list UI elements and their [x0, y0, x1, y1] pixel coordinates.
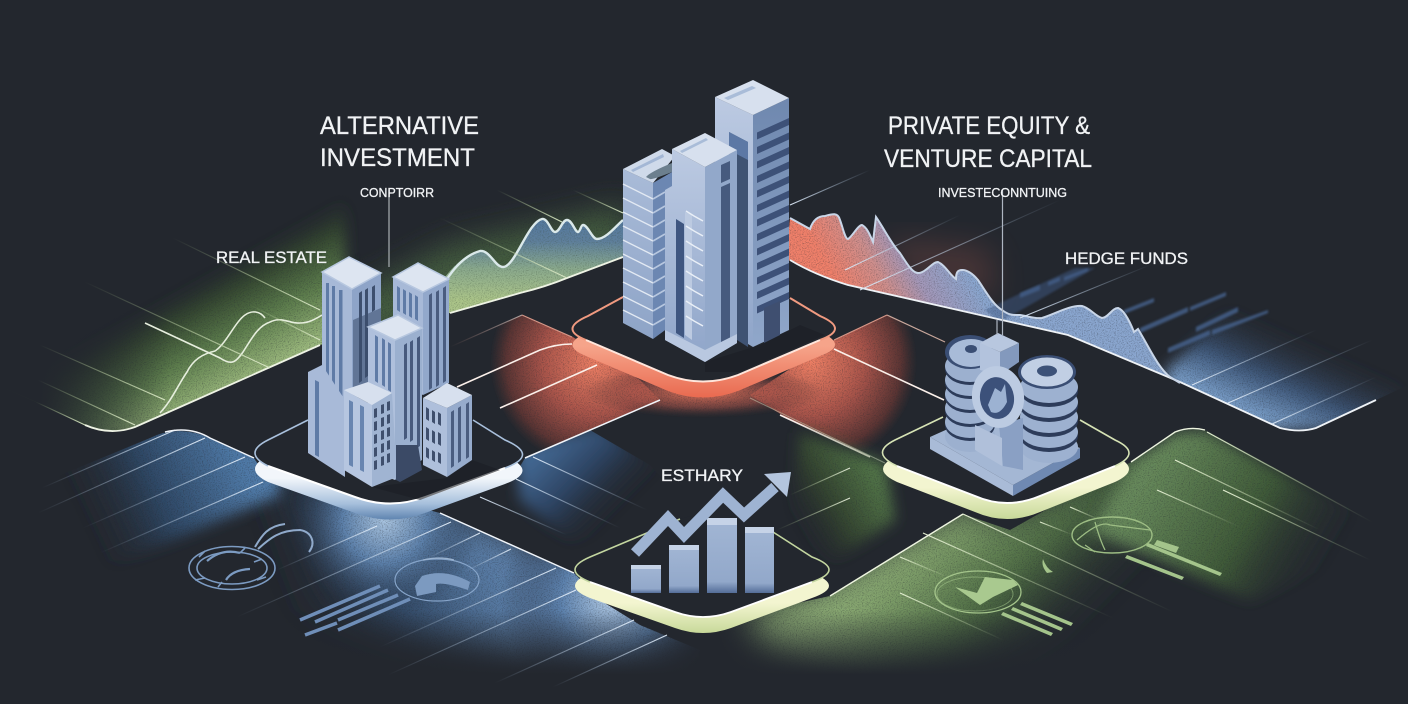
mid green wedge — [790, 432, 895, 560]
cube — [980, 333, 1019, 375]
front left block — [344, 382, 397, 487]
heading: private equity and venture capital: PRIVATE EQUITY & — [888, 112, 1090, 140]
icon: blue globe with bars — [300, 558, 479, 635]
panel: red and blue falling chart region right — [785, 170, 1400, 430]
icon: green globe two with speed bars — [1042, 517, 1222, 580]
stripe lines — [790, 170, 1376, 424]
upper right blue wedge — [510, 430, 640, 532]
right stack — [1018, 355, 1078, 463]
panel: right platform — [882, 402, 1129, 519]
bottom fade — [0, 610, 1408, 675]
panel: blue region bottom left — [88, 430, 688, 668]
icon: blue ring — [189, 524, 312, 590]
hazy band behind chart — [985, 268, 1095, 322]
leader line: left — [388, 190, 390, 267]
label: conptoirr: CONPTOIRR — [360, 185, 434, 200]
heading: alternative investment: INVESTMENT — [320, 144, 475, 172]
icon: left office building cluster — [308, 257, 500, 500]
front right block — [423, 383, 472, 477]
lower edge line — [85, 257, 623, 431]
tower: left slotted — [623, 149, 675, 339]
shadow — [705, 325, 825, 372]
bars — [631, 518, 774, 593]
panel: red glow around centre platform — [455, 314, 946, 458]
label: hedge funds: HEDGE FUNDS — [1065, 249, 1188, 268]
panel: green chart region left — [36, 191, 623, 432]
tower three — [368, 315, 422, 480]
label: investeconntuing: INVESTECONNTUING — [938, 185, 1067, 200]
chart curve — [790, 214, 1180, 383]
stripe lines: green region — [750, 398, 1372, 640]
recessed entrance — [396, 445, 422, 482]
bars behind chart — [1020, 268, 1268, 353]
panel: green region bottom right — [734, 424, 1323, 668]
leader line: right — [997, 190, 1002, 335]
heading: private equity and venture capital — [884, 112, 1092, 173]
base slab — [930, 437, 1013, 496]
panel: centre platform — [572, 275, 835, 398]
left stack — [945, 335, 995, 452]
heading: alternative investment — [320, 112, 479, 172]
tower: middle — [665, 133, 737, 362]
icon: green globe one with speed bars — [935, 571, 1073, 636]
lower edge line — [790, 260, 1376, 430]
panel: left platform — [255, 402, 522, 520]
heading: alternative investment: ALTERNATIVE — [320, 112, 479, 140]
rising arrow — [635, 472, 791, 553]
label: esthary: ESTHARY — [661, 466, 743, 485]
label: real estate: REAL ESTATE — [216, 249, 327, 267]
medallion on post — [968, 363, 1028, 470]
tower one — [322, 257, 381, 470]
small left block — [308, 365, 345, 477]
chart curves — [145, 312, 322, 413]
panel: bottom platform — [575, 514, 829, 633]
heading: private equity and venture capital: VENTURE CAPITAL — [884, 145, 1092, 173]
stripe lines: blue region — [38, 400, 667, 687]
stripe lines — [36, 190, 623, 425]
tower two — [393, 263, 449, 395]
tower: right tall — [715, 80, 789, 347]
icon: centre office towers — [623, 80, 825, 372]
icon: bar chart with rising arrow — [631, 472, 791, 593]
icon: coin stacks with medallion — [930, 333, 1080, 496]
